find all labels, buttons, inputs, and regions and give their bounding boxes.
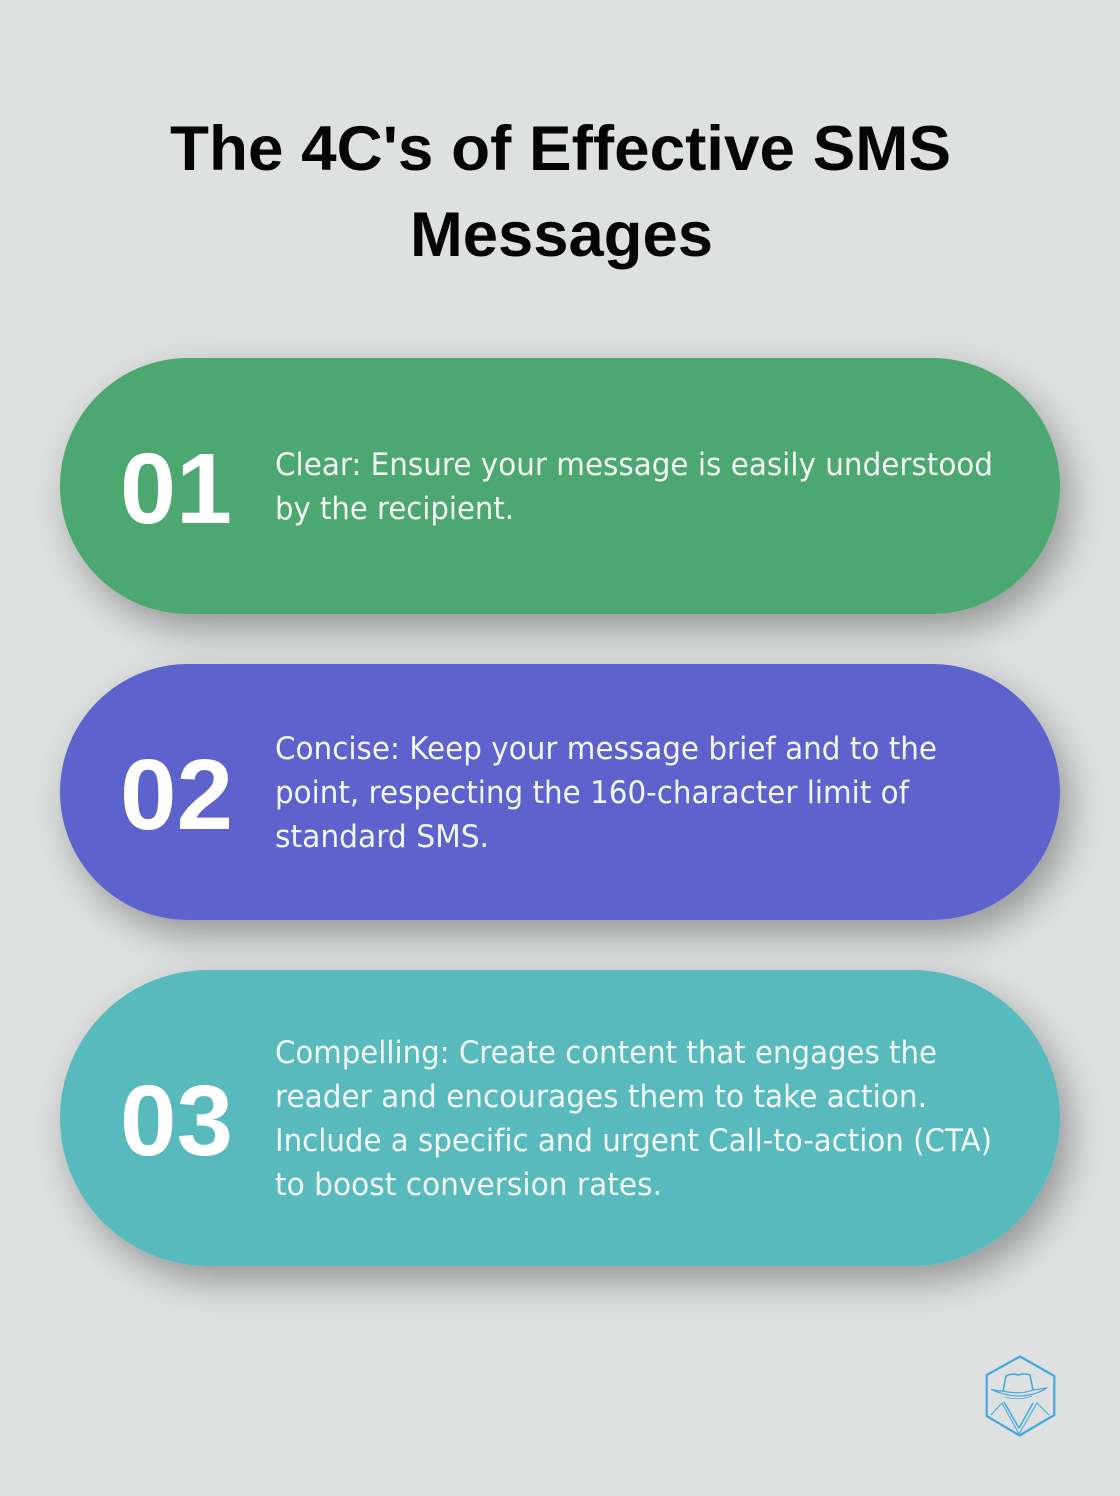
text: Compelling: Include a specific and urgent Call-to-action (CTA) <box>275 1123 992 1159</box>
text: Clear: by the recipient. <box>275 491 514 527</box>
green pill card <box>60 358 1060 614</box>
text: Compelling <box>275 1035 992 1203</box>
text: Concise: Concise: Keep your message brief and to the <box>275 731 937 767</box>
text: Clear <box>275 447 993 527</box>
number 03: 03 <box>120 1065 233 1177</box>
title: Messages <box>410 200 713 270</box>
text: Concise: point, respecting the 160-character limit of <box>275 775 910 811</box>
text: Clear: Clear: Ensure your message is easily understood <box>275 447 993 483</box>
panel: 02 Concise <box>60 664 1060 920</box>
icon: hexagon spy logo <box>987 1356 1054 1436</box>
text: Concise: standard SMS. <box>275 819 489 855</box>
title: The 4C's of Effective SMS <box>170 114 951 184</box>
teal pill card <box>60 970 1060 1266</box>
text: Compelling: to boost conversion rates. <box>275 1167 662 1203</box>
title <box>170 114 951 270</box>
number 02: 02 <box>120 739 233 851</box>
number 01: 01 <box>120 433 232 545</box>
text: Concise <box>275 731 937 855</box>
purple pill card <box>60 664 1060 920</box>
text: Compelling: reader and encourages them to take action. <box>275 1079 927 1115</box>
panel: 03 Compelling <box>60 970 1060 1266</box>
panel: 01 Clear <box>60 358 1060 614</box>
text: Compelling: Compelling: Create content that engages the <box>275 1035 937 1071</box>
